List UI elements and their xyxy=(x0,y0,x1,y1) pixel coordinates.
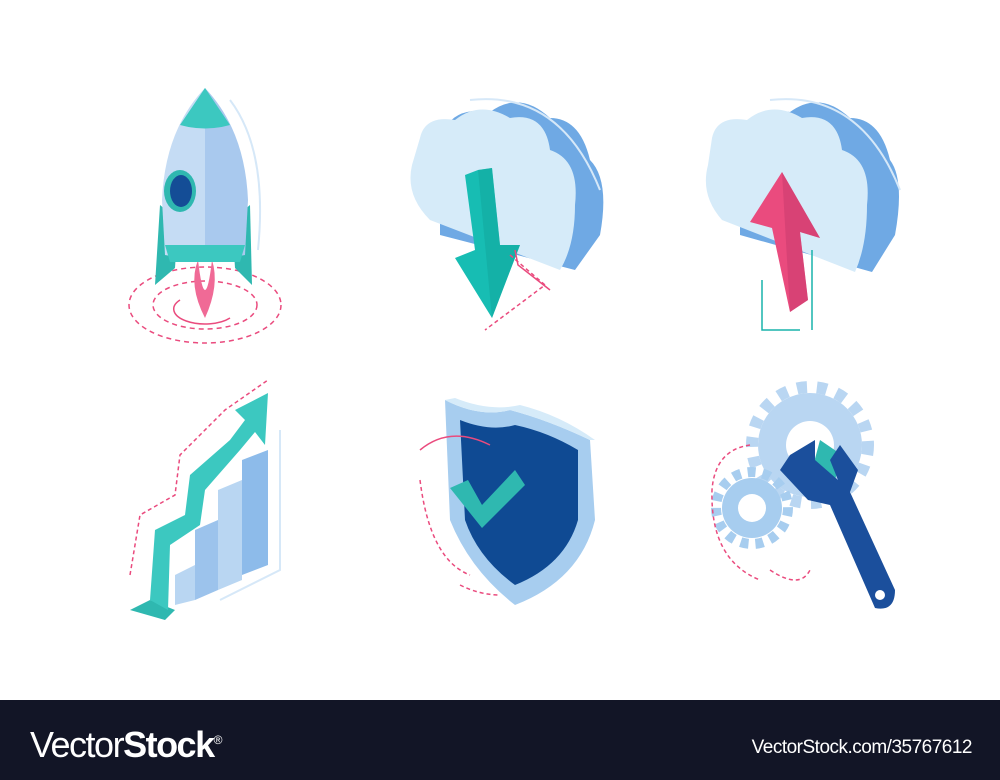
icon: cloud download xyxy=(410,99,603,330)
footer logo: VectorStock® xyxy=(30,724,221,765)
icon: cloud upload xyxy=(706,99,900,330)
icon: gears and wrench xyxy=(712,387,895,609)
footer bar xyxy=(0,700,1000,780)
icon: shield with check xyxy=(420,398,595,605)
footer url: VectorStock.com/35767612 xyxy=(752,737,972,758)
icon: growth chart xyxy=(130,380,280,620)
icon: rocket xyxy=(129,88,281,343)
